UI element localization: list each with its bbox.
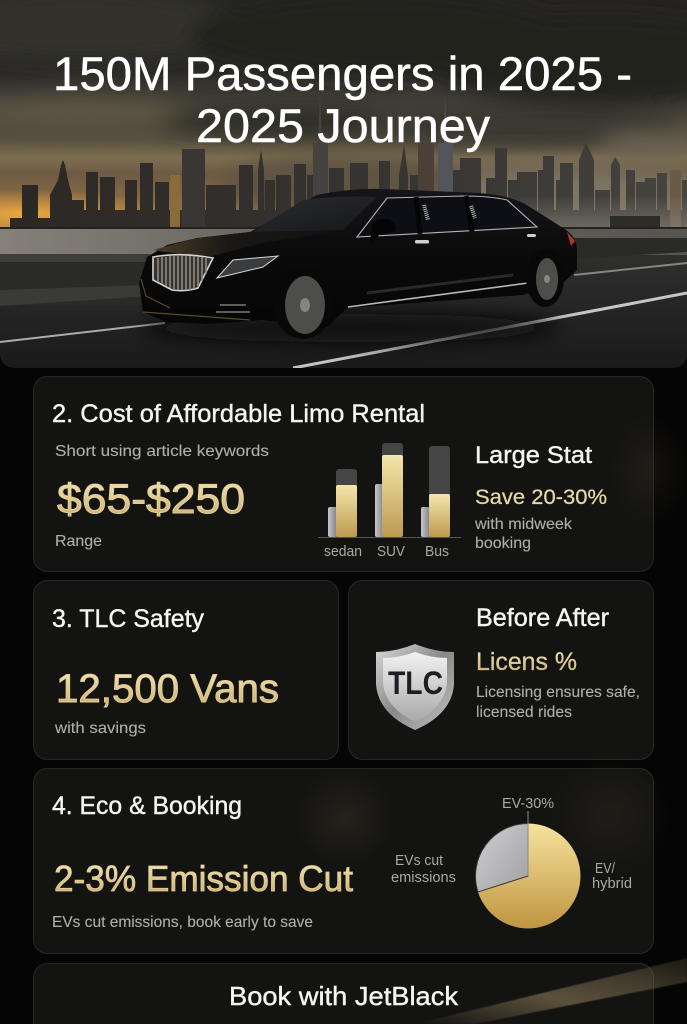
range label: Range [55, 533, 102, 550]
lower intake [216, 305, 250, 312]
pie chart: hybrid [592, 876, 632, 892]
price range stat: $65-$250 [57, 475, 245, 522]
bar chart: sedan [324, 544, 362, 560]
headlight [217, 256, 278, 278]
wing mirror [370, 219, 396, 245]
sill chrome [348, 283, 528, 307]
hero image: limousine and skyline [0, 0, 687, 368]
grille [153, 255, 213, 291]
heading: 3. TLC Safety [52, 605, 204, 633]
licensing note [476, 684, 640, 721]
title [53, 47, 632, 152]
licensing note: Licensing ensures safe, [476, 684, 640, 701]
sky with clouds [0, 0, 687, 238]
pie chart: EV/ [595, 861, 616, 877]
rear wheel [526, 258, 564, 307]
panel: cost of affordable limo rental [34, 376, 687, 572]
pie chart [391, 796, 632, 928]
savings note: booking [475, 535, 531, 552]
vans stat: 12,500 Vans [56, 667, 279, 711]
body side highlight [367, 275, 513, 293]
panel: before after licensing [348, 580, 654, 760]
panel: TLC safety [34, 580, 338, 760]
tail light [567, 232, 575, 246]
pie chart: EVs cut [395, 853, 443, 869]
pie chart: emissions [391, 870, 456, 886]
savings note: with savings [54, 720, 146, 737]
limousine [139, 189, 577, 342]
city skyline [0, 93, 687, 229]
front bumper glint [141, 279, 250, 320]
description: EVs cut emissions, book early to save [52, 914, 313, 931]
title: 150M Passengers in 2025 - [53, 47, 632, 100]
call to action heading: Book with JetBlack [229, 981, 459, 1011]
savings stat: Save 20-30% [475, 486, 607, 509]
emission stat: 2-3% Emission Cut [54, 858, 353, 899]
bar chart: Bus [425, 544, 449, 560]
side windows [357, 196, 537, 237]
savings note: with midweek [474, 516, 573, 533]
icon: TLC shield [376, 644, 454, 730]
bar chart: SUV [377, 544, 405, 560]
water [0, 229, 687, 257]
front wheel [278, 276, 325, 339]
road markings [0, 263, 687, 368]
hood [154, 232, 281, 256]
licensing note: licensed rides [476, 704, 572, 721]
icon: TLC shield: TLC [388, 665, 443, 701]
large stat heading: Large Stat [475, 442, 592, 469]
heading: 4. Eco & Booking [52, 792, 242, 820]
panel: call to action [34, 958, 687, 1024]
road and sea wall [0, 238, 687, 368]
title: 2025 Journey [196, 99, 491, 152]
pie chart: EV-30% [502, 796, 554, 812]
car body [139, 189, 577, 327]
heading: Before After [476, 604, 609, 632]
savings note [474, 516, 573, 552]
windshield [252, 196, 377, 232]
bar chart [318, 443, 461, 560]
panel: eco and booking [34, 755, 670, 954]
licensing stat: Licens % [476, 648, 577, 676]
heading: 2. Cost of Affordable Limo Rental [52, 400, 425, 428]
subheading: Short using article keywords [55, 443, 269, 460]
door handles [415, 240, 429, 244]
